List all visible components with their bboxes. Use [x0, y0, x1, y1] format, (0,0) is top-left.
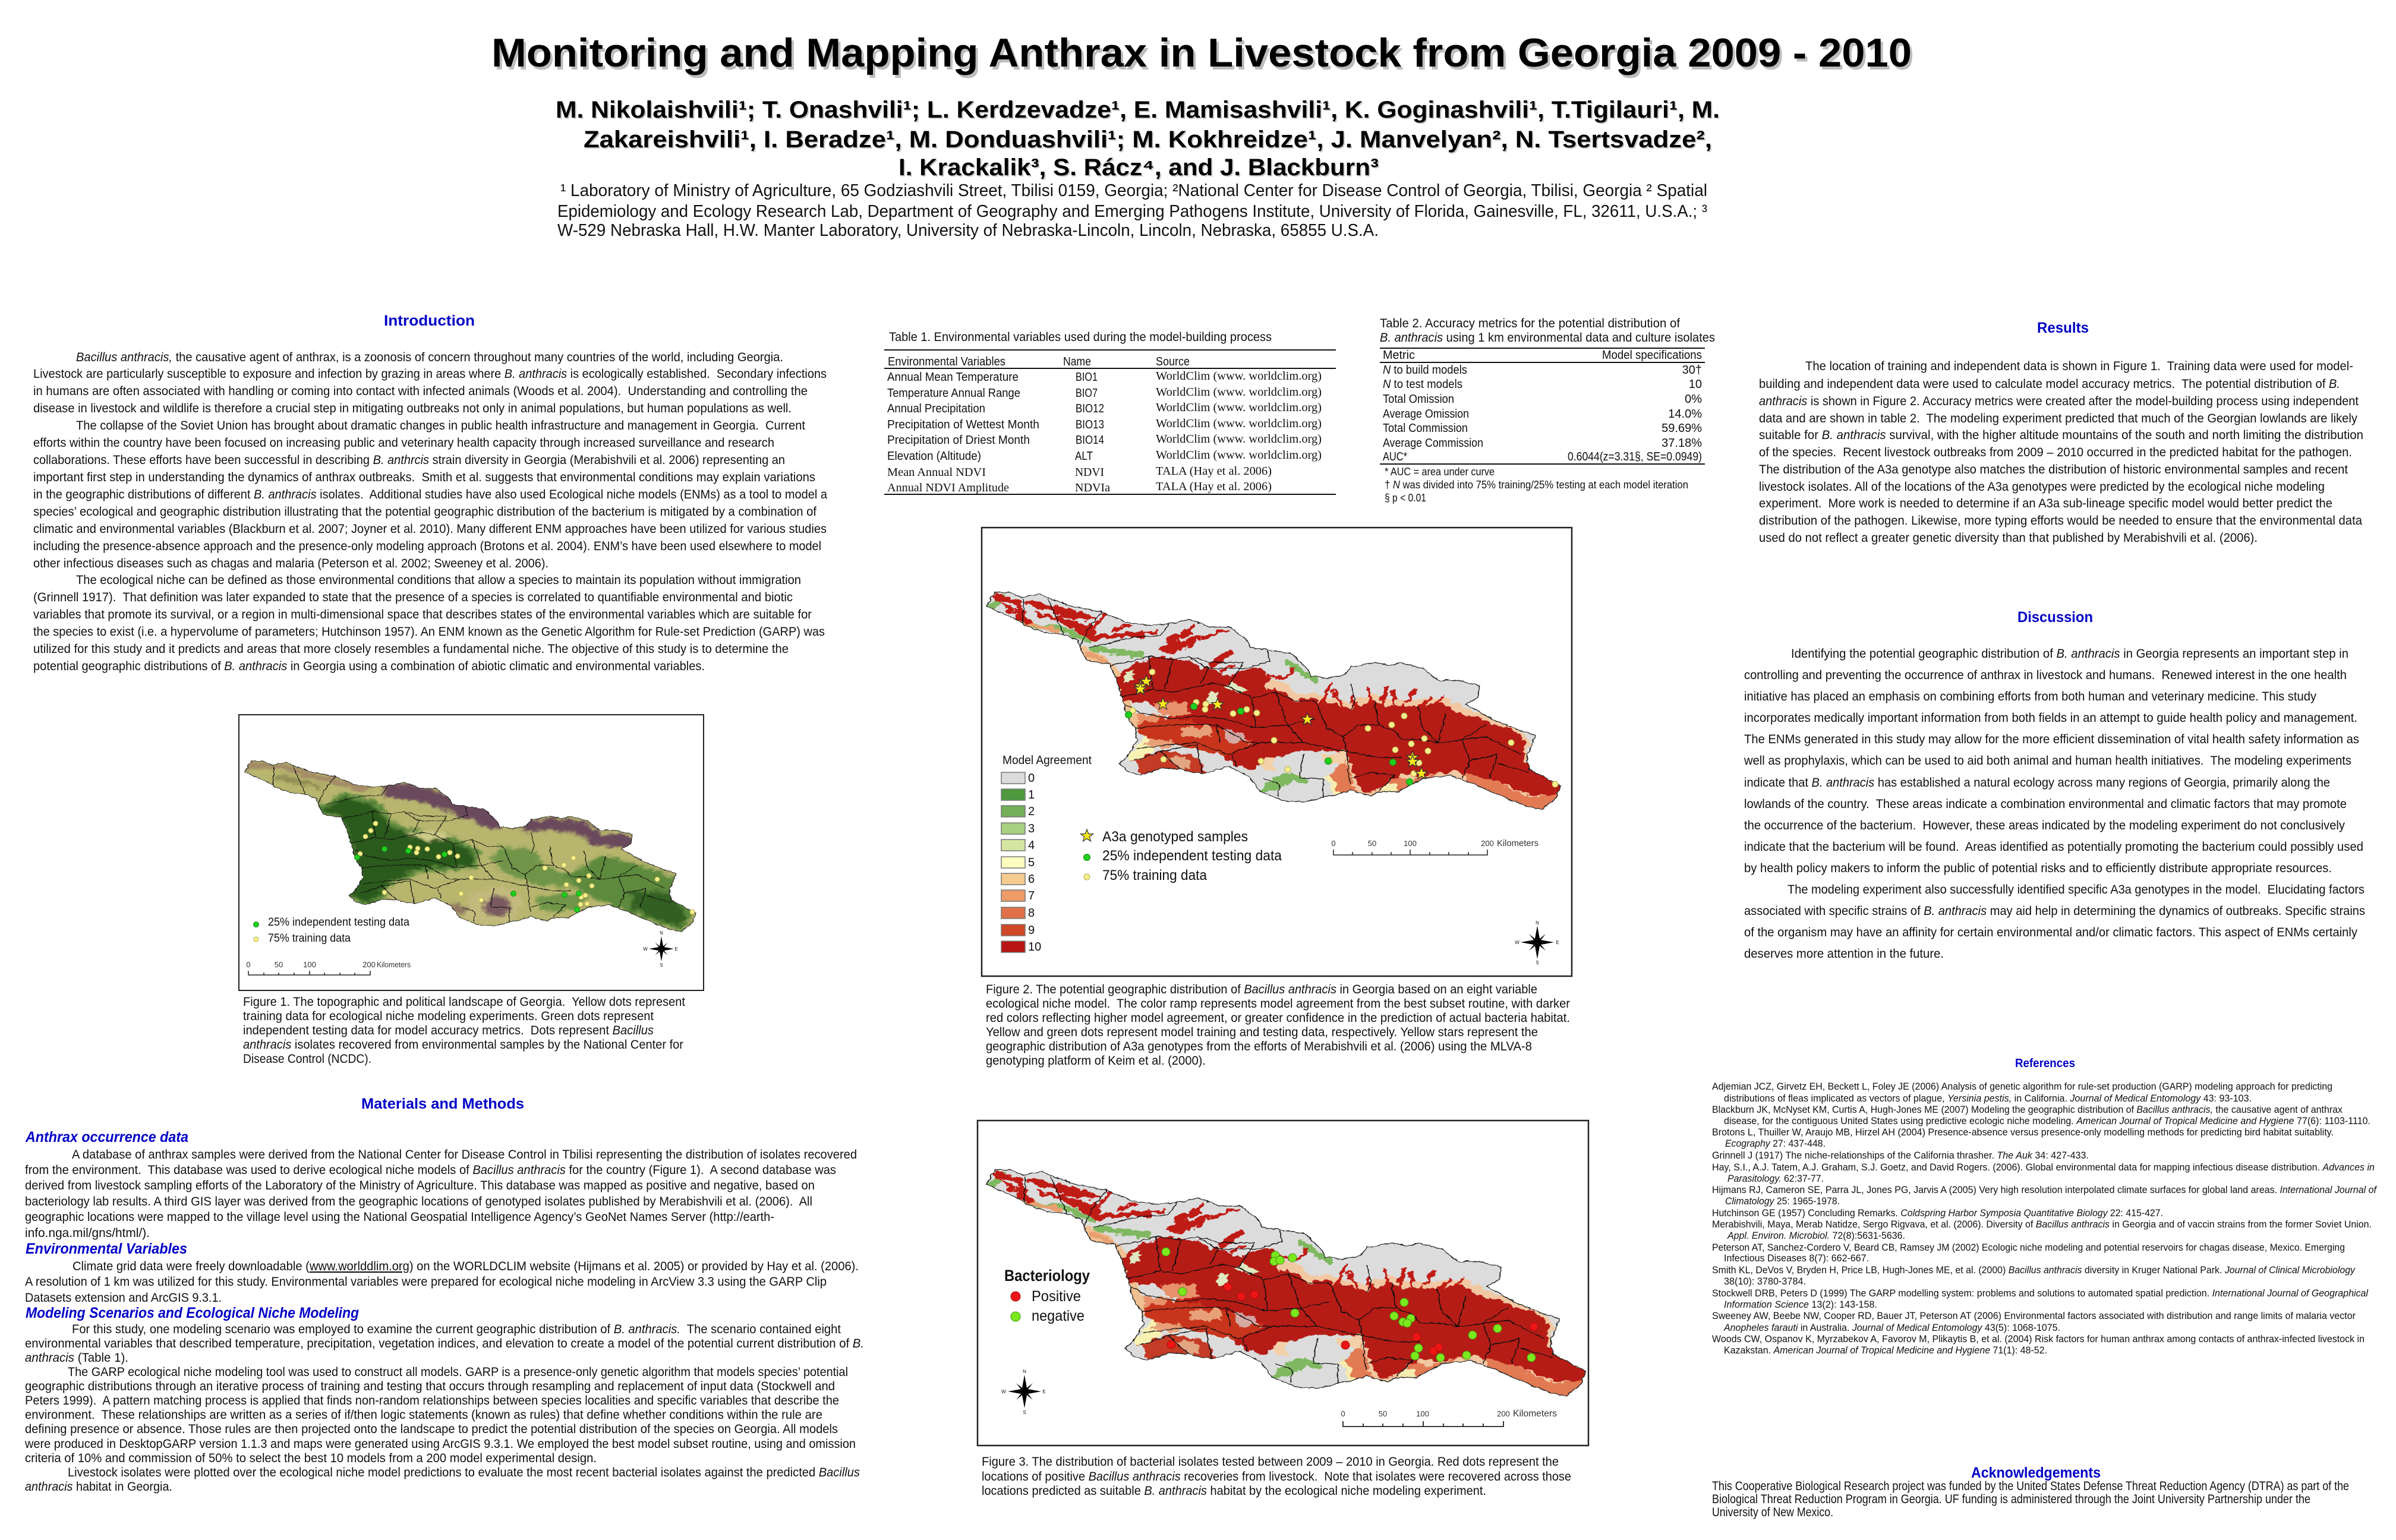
discussion text: [1744, 647, 2365, 961]
references list: Ecography 27: 437-448.: [1725, 1138, 1826, 1149]
figure 3 north arrow: E: [1042, 1389, 1046, 1394]
table 2 rows: 0.6044(z=3.31§, SE=0.0949): [1568, 450, 1702, 463]
figure 2 caption: Yellow and green dots represent model training and testing data, respectively. Yellow stars represent the: [986, 1025, 1538, 1039]
subheading: environmental variables: Environmental Variables: [26, 1241, 187, 1257]
figure 2 model agreement legend: 1: [1028, 788, 1035, 801]
references list: Stockwell DRB, Peters D (1999) The GARP modelling system: problems and solutions to automated spatial prediction. International Journal of Geographical: [1712, 1287, 2369, 1299]
figure 2 caption: [986, 983, 1570, 1068]
modeling scenarios text: criteria of 10% and commission of 50% to select the best 10 models from a 200 model experimental design.: [25, 1451, 597, 1465]
title: Monitoring and Mapping Anthrax in Livestock from Georgia 2009 - 2010: [491, 30, 1912, 75]
introduction text: efforts within the country have been focused on increasing public and veterinary health capacity through increased surveillance and research: [33, 436, 774, 450]
environmental variables text: [25, 1260, 859, 1305]
modeling scenarios text: environmental variables that described temperature, precipitation, vegetation indices, and elevation to create a model of the potential current distribution of B.: [25, 1337, 864, 1350]
heading: materials and methods: Materials and Methods: [361, 1096, 524, 1112]
acknowledgements text: Biological Threat Reduction Program in Georgia. UF funding is administered through the Joint University Partnership under the: [1712, 1492, 2310, 1506]
authors: I. Krackalik³, S. Rácz⁴, and J. Blackburn³: [898, 154, 1379, 181]
modeling scenarios text: anthracis habitat in Georgia.: [25, 1480, 172, 1494]
heading: introduction: Introduction: [384, 313, 475, 329]
references list: distributions of fleas implicated as vectors of plague, Yersinia pestis, in California. Journal of Medical Entomology 43: 93-103.: [1724, 1093, 2252, 1104]
figure 2 model agreement legend: 10: [1028, 941, 1041, 954]
anthrax occurrence text: geographic locations were mapped to the village level using the National Geospatial Intelligence Agency’s GeoNet Names Server (http://earth-: [25, 1210, 774, 1224]
figure 1 caption: [243, 995, 685, 1066]
table 1 rows: BIO12: [1076, 402, 1104, 415]
references list: Woods CW, Ospanov K, Myrzabekov A, Favorov M, Plikaytis B, et al. (2004) Risk factors for human anthrax among contacts of anthrax-infected livestock in: [1712, 1333, 2365, 1345]
discussion text: indicate that B. anthracis has established a natural ecology across many regions of Georgia, primarily along the: [1744, 776, 2330, 790]
table 1 rows: TALA (Hay et al. 2006): [1156, 480, 1272, 493]
table 2 rows: N to test models: [1383, 378, 1462, 391]
figure 2 north arrow: W: [1515, 940, 1519, 945]
figure 1 scale bar: 0: [246, 960, 251, 969]
figure 1 caption: training data for ecological niche modeling experiments. Green dots represent: [243, 1009, 654, 1023]
figure 3 bacteriology legend: negative: [1032, 1308, 1084, 1324]
figure 3 scale bar: 0: [1341, 1409, 1345, 1418]
figure 2 model agreement legend: 5: [1028, 856, 1035, 869]
discussion text: of the organism may have an affinity for certain environmental and/or climatic factors. This aspect of ENMs certainly: [1744, 926, 2357, 939]
figure 1 north arrow: W: [643, 946, 648, 952]
references list: Brotons L, Thuiller W, Araujo MB, Hirzel AH (2004) Presence-absence versus presence-only modelling methods for predicting bird habitat suitablity.: [1712, 1126, 2334, 1138]
results text: used do not reflect a greater genetic diversity than that published by Merabishvili et al. (2006).: [1759, 531, 2258, 545]
figure 2 caption: Figure 2. The potential geographic distribution of Bacillus anthracis in Georgia based on an eight variable: [986, 983, 1537, 996]
introduction text: The ecological niche can be defined as those environmental conditions that allow a species to maintain its population without immigration: [76, 573, 801, 587]
figure 2 north arrow: N: [1536, 920, 1539, 926]
table 2 header: [1383, 349, 1702, 362]
figure 1 caption: anthracis isolates recovered from environmental samples by the National Center for: [243, 1038, 683, 1052]
table 1 rows: ALT: [1075, 450, 1093, 463]
figure 2 caption: genotyping platform of Keim et al. (2000).: [986, 1054, 1206, 1068]
figure 3 north arrow: N: [1023, 1369, 1026, 1374]
table 1 header: Name: [1063, 355, 1091, 368]
discussion text: The ENMs generated in this study may allow for the more efficient dissemination of vital health safety information as: [1744, 733, 2359, 746]
figure 1 caption: independent testing data for model accuracy metrics. Dots represent Bacillus: [243, 1024, 654, 1037]
figure 2 caption: red colors reflecting higher model agreement, or greater confidence in the prediction of actual bacteria habitat.: [986, 1011, 1570, 1025]
table 1 rows: WorldClim (www. worldclim.org): [1156, 401, 1322, 414]
introduction text: utilized for this study and it predicts and areas that more closely resembles a fundamental niche. The objective of this study is to determine the: [33, 642, 789, 656]
table 2 rows: 14.0%: [1668, 408, 1702, 421]
anthrax occurrence text: from the environment. This database was used to derive ecological niche models of Bacillus anthracis for the country (Figure 1). A second database was: [25, 1163, 836, 1177]
figure 2 testing dots: [1126, 703, 1413, 785]
references list: Anopheles farauti in Australia. Journal of Medical Entomology 43(5): 1068-1075.: [1723, 1322, 2060, 1333]
figure 1 scale bar: Kilometers: [377, 960, 411, 969]
introduction text: disease in livestock and wildlife is therefore a crucial step in mitigating outbreaks not only in animal populations, but human populations as well.: [33, 402, 792, 415]
references list: Peterson AT, Sanchez-Cordero V, Beard CB, Ramsey JM (2002) Ecologic niche modeling and potential reservoirs for chagas disease, Mexico. Emerging: [1712, 1242, 2345, 1253]
table 2 header: Metric: [1383, 349, 1415, 362]
table 1 rows: [887, 370, 1322, 494]
figure 2 scale bar: [1331, 838, 1539, 855]
introduction text: important first step in understanding the dynamics of anthrax outbreaks. Smith et al. suggests that environmental conditions may explain variations: [33, 471, 815, 484]
table 2 rows: 30†: [1682, 364, 1702, 377]
references list: disease, for the contiguous United States using predictive ecologic niche modeling. American Journal of Tropical Medicine and Hygiene 77(6): 1103-1110.: [1724, 1115, 2370, 1126]
references list: Hutchinson GE (1957) Concluding Remarks. Coldspring Harbor Symposia Quantitative Biology 22: 415-427.: [1712, 1207, 2163, 1219]
figure 1 north arrow: E: [674, 946, 678, 952]
figure 2 caption: geographic distribution of A3a genotypes from the efforts of Merabishvili et al. (2006) using the MLVA-8: [986, 1040, 1532, 1053]
figure 1 scale bar: 200: [362, 960, 376, 969]
table 2 rows: Total Omission: [1383, 393, 1454, 406]
introduction text: other infectious diseases such as chagas and malaria (Peterson et al. 2002; Sweeney et al. 2006).: [33, 557, 548, 570]
table 2 rows: Average Commission: [1383, 437, 1483, 450]
table 1 header: [888, 355, 1190, 368]
figure 2: model agreement map: [975, 528, 1577, 976]
table 1 rules: [884, 350, 1336, 494]
discussion text: Identifying the potential geographic distribution of B. anthracis in Georgia represents an important step in: [1791, 647, 2348, 661]
figure 3 scale bar: [1341, 1409, 1557, 1427]
figure 2 model agreement legend: 3: [1028, 822, 1035, 835]
figure 3 north arrow: [1001, 1369, 1046, 1415]
results text: The distribution of the A3a genotype also matches the distribution of historic environmental samples and recent: [1759, 463, 2348, 476]
anthrax occurrence text: info.nga.mil/gns/html/).: [25, 1226, 150, 1240]
table 2 footnotes: † N was divided into 75% training/25% testing at each model iteration: [1385, 479, 1688, 491]
table 1 rows: WorldClim (www. worldclim.org): [1156, 433, 1322, 446]
table 2 title: Table 2. Accuracy metrics for the potential distribution of: [1380, 317, 1680, 330]
authors: [556, 97, 1720, 181]
discussion text: The modeling experiment also successfully identified specific A3a genotypes in the model. Elucidating factors: [1787, 883, 2365, 897]
table 1 header: Environmental Variables: [888, 355, 1005, 368]
references list: 38(10): 3780-3784.: [1724, 1276, 1806, 1287]
environmental variables text: Datasets extension and ArcGIS 9.3.1.: [25, 1291, 222, 1305]
introduction text: potential geographic distributions of B. anthracis in Georgia using a combination of abiotic climatic and environmental variables.: [33, 659, 705, 673]
figure 3 caption: [982, 1455, 1571, 1498]
figure 1 topographic landscape map: [244, 760, 696, 933]
table 2 rows: 59.69%: [1662, 422, 1702, 435]
table 2: accuracy metrics: [1380, 317, 1715, 504]
table 2 title: [1380, 317, 1715, 345]
table 1 rows: BIO1: [1076, 371, 1098, 384]
table 1 rows: TALA (Hay et al. 2006): [1156, 465, 1272, 478]
table 2 header: Model specifications: [1602, 349, 1702, 362]
modeling scenarios text: environment. These relationships are written as a series of if/then logic statements (known as rules) that define whether conditions within the rule are: [25, 1408, 822, 1422]
table 2 rows: Total Commission: [1383, 422, 1468, 435]
figure 2 north arrow: E: [1556, 940, 1559, 945]
figure 2 symbol legend: 75% training data: [1102, 867, 1208, 883]
authors: M. Nikolaishvili¹; T. Onashvili¹; L. Kerdzevadze¹, E. Mamisashvili¹, K. Goginashvili¹, T.Tigilauri¹, M.: [556, 97, 1720, 123]
results text: [1759, 359, 2363, 545]
discussion text: controlling and preventing the occurrence of anthrax in livestock and humans. Renewed interest in the one health: [1744, 668, 2347, 682]
figure 1 legend: [253, 916, 409, 945]
subheading: anthrax occurrence data: Anthrax occurrence data: [25, 1129, 188, 1145]
modeling scenarios text: were produced in DesktopGARP version 1.1.3 and maps were generated using ArcGIS 9.3.1. We employed the best model subset routine, using and omission: [24, 1437, 856, 1451]
figure 2 model agreement legend: 9: [1028, 924, 1035, 937]
discussion text: associated with specific strains of B. anthracis may aid help in determining the dynamics of outbreaks. Specific strains: [1744, 904, 2365, 918]
discussion text: indicate that the bacterium will be found. Areas identified as potentially promoting the bacterium could possibly used: [1744, 840, 2363, 854]
results text: livestock isolates. All of the locations of the A3a genotypes were predicted by the ecological niche modeling: [1759, 480, 2325, 494]
figure 2 model agreement legend: 4: [1028, 839, 1035, 852]
figure 2 north arrow: S: [1536, 960, 1539, 965]
results text: The location of training and independent data is shown in Figure 1. Training data were used for model-: [1805, 359, 2353, 373]
table 1 rows: NDVIa: [1075, 481, 1110, 494]
figure 3 scale bar: 200: [1497, 1409, 1510, 1418]
figure 1 caption: Figure 1. The topographic and political landscape of Georgia. Yellow dots represent: [243, 995, 685, 1009]
environmental variables text: Climate grid data were freely downloadable (www.worlddlim.org) on the WORLDCLIM website (Hijmans et al. 2005) or provided by Hay et al. (2006).: [72, 1260, 859, 1273]
acknowledgements text: [1712, 1479, 2349, 1519]
modeling scenarios text: [24, 1323, 864, 1494]
references list: Hay, S.I., A.J. Tatem, A.J. Graham, S.J. Goetz, and David Rogers. (2006). Global environmental data for mapping infectious disease distribution. Advances in: [1712, 1162, 2375, 1173]
references list: Kazakstan. American Journal of Tropical Medicine and Hygiene 71(1): 48-52.: [1724, 1345, 2047, 1356]
table 1 rows: Annual Precipitation: [887, 402, 985, 415]
table 1 rows: Temperature Annual Range: [887, 387, 1020, 400]
results text: data and are shown in table 2. The modeling experiment predicted that much of the Georgian lowlands are likely: [1759, 412, 2357, 425]
affiliations: [557, 181, 1707, 240]
introduction text: The collapse of the Soviet Union has brought about dramatic changes in public health infrastructure and management in Georgia. Current: [76, 419, 805, 433]
modeling scenarios text: Peters 1999). A pattern matching process is applied that finds non-random relationships between species localities and specific variables that describe the: [25, 1394, 839, 1408]
table 2 footnotes: * AUC = area under curve: [1385, 466, 1495, 478]
references list: Smith KL, DeVos V, Bryden H, Price LB, Hugh-Jones ME, et al. (2000) Bacillus anthracis diversity in Kruger National Park. Journal of Clinical Microbiology: [1712, 1264, 2356, 1276]
figure 2 A3a genotype stars: [1134, 675, 1427, 779]
figure 3 caption: Figure 3. The distribution of bacterial isolates tested between 2009 – 2010 in Georgia. Red dots represent the: [982, 1455, 1559, 1469]
modeling scenarios text: The GARP ecological niche modeling tool was used to construct all models. GARP is a presence-only genetic algorithm that models species’ potential: [68, 1365, 848, 1379]
figure 3 scale bar: 100: [1416, 1409, 1429, 1418]
heading: references: References: [2015, 1057, 2075, 1070]
references list: Sweeney AW, Beebe NW, Cooper RD, Bauer JT, Peterson AT (2006) Environmental factors associated with distribution and range limits of malaria vector: [1712, 1310, 2356, 1321]
figure 2 north arrow: [1515, 920, 1559, 965]
table 1 rows: Precipitation of Wettest Month: [887, 418, 1039, 431]
figure 1 legend: 25% independent testing data: [268, 916, 409, 929]
table 2 rows: 0%: [1685, 393, 1702, 406]
references list: Appl. Environ. Microbiol. 72(8):5631-5636.: [1727, 1230, 1905, 1241]
figure 3 bacteriology legend: Bacteriology: [1004, 1267, 1090, 1285]
figure 3 north arrow: S: [1023, 1410, 1026, 1415]
results text: experiment. More work is needed to determine if an A3a sub-lineage specific model would better predict the: [1759, 497, 2332, 510]
table 1 rows: BIO14: [1076, 434, 1104, 447]
figure 2 scale bar: 200: [1481, 839, 1494, 848]
table 1 rows: Mean Annual NDVI: [887, 466, 986, 479]
subheading: modeling scenarios: Modeling Scenarios and Ecological Niche Modeling: [26, 1305, 359, 1321]
table 2 rules: [1380, 348, 1705, 464]
introduction text: species’ ecological and geographic distribution illustrating that the potential geographic distribution of the bacterium is mitigated by a combination of: [33, 505, 816, 519]
table 2 rows: [1383, 364, 1702, 463]
figure 2 scale bar: Kilometers: [1497, 838, 1539, 848]
discussion text: initiative has placed an emphasis on combining efforts from both human and veterinary medicine. This study: [1744, 690, 2316, 703]
figure 2 training dots: [1130, 669, 1558, 787]
discussion text: well as prophylaxis, which can be used to aid both animal and human health initiatives. The modeling experiments: [1744, 754, 2351, 768]
figure 1 scale bar: 50: [275, 960, 283, 969]
discussion text: lowlands of the country. These areas indicate a combination environmental and climatic factors that may promote: [1744, 797, 2347, 811]
table 1: environmental variables: [884, 330, 1336, 494]
anthrax occurrence text: bacteriology lab results. A third GIS layer was derived from the geographic locations of genotyped isolates published by Merabishvili et al. (2006). All: [25, 1195, 812, 1208]
figure 1 north arrow: [643, 930, 678, 968]
table 1 rows: Annual Mean Temperature: [887, 371, 1019, 384]
figure 2 symbol legend: 25% independent testing data: [1102, 848, 1282, 864]
introduction text: variables that promote its survival, or a region in multi-dimensional space that describes states of the environmental variables which are suitable for: [33, 608, 812, 621]
figure 1: topographic map: [235, 715, 708, 990]
figure 2 symbol legend: [1080, 829, 1282, 883]
modeling scenarios text: defining presence or absence. Those rules are then projected onto the landscape to predict the potential distribution of the species on Georgia. All models: [25, 1422, 838, 1436]
introduction text: (Grinnell 1917). That definition was later expanded to state that the presence of a species is correlated to quantifiable environmental and biotic: [33, 591, 793, 604]
figure 1 scale bar: [246, 960, 411, 975]
figure 2 model agreement legend: 2: [1028, 805, 1035, 818]
figure 1 scale bar: 100: [303, 960, 316, 969]
results text: distribution of the pathogen. Likewise, more typing efforts would be needed to ensure that the environmental data: [1759, 514, 2362, 528]
table 1 rows: Precipitation of Driest Month: [887, 434, 1030, 447]
discussion text: deserves more attention in the future.: [1744, 947, 1944, 961]
results text: suitable for B. anthracis survival, with the higher altitude mountains of the south and north limiting the distribution: [1759, 428, 2363, 442]
figure 1 north arrow: N: [660, 930, 663, 936]
table 2 footnotes: [1385, 466, 1688, 504]
modeling scenarios text: For this study, one modeling scenario was employed to examine the current geographic distribution of B. anthracis. The scenario contained eight: [72, 1323, 841, 1336]
modeling scenarios text: geographic distributions through an iterative process of training and testing that occurs through resampling and replacement of input data (Stockwell and: [25, 1380, 835, 1393]
figure 3 frame: [978, 1121, 1588, 1446]
table 1 rows: BIO13: [1076, 418, 1104, 431]
anthrax occurrence text: [25, 1148, 857, 1240]
figure 2 frame: [982, 528, 1572, 976]
acknowledgements text: University of New Mexico.: [1712, 1506, 1833, 1519]
anthrax occurrence text: derived from livestock sampling efforts of the Laboratory of the Ministry of Agriculture. This database was mapped as positive and negative, based on: [25, 1179, 815, 1192]
figure 2 model agreement legend: 0: [1028, 772, 1035, 785]
figure 3 positive sample dots: [1167, 1283, 1538, 1355]
figure 1 frame: [239, 715, 704, 990]
table 2 rows: 10: [1689, 378, 1702, 391]
table 1 rows: Elevation (Altitude): [887, 450, 981, 463]
introduction text: in the geographic distributions of different B. anthracis isolates. Additional studies have also used Ecological niche models (ENMs) as a tool to model a: [33, 488, 827, 501]
table 1 header: Source: [1156, 355, 1190, 368]
figure 3 caption: locations predicted as suitable B. anthracis habitat by the ecological niche modeling experiment.: [982, 1484, 1486, 1498]
table 1 rows: WorldClim (www. worldclim.org): [1156, 449, 1322, 462]
figure 3 niche model map: [985, 1169, 1587, 1397]
references list: Information Science 13(2): 143-158.: [1724, 1299, 1877, 1310]
table 2 rows: Average Omission: [1383, 408, 1469, 421]
references list: Blackburn JK, McNyset KM, Curtis A, Hugh-Jones ME (2007) Modeling the geographic distribution of Bacillus anthracis, the causative agent of anthrax: [1712, 1104, 2343, 1115]
table 1 rows: WorldClim (www. worldclim.org): [1156, 386, 1322, 399]
modeling scenarios text: Livestock isolates were plotted over the ecological niche model predictions to evaluate the most recent bacterial isolates against the predicted Bacillus: [68, 1466, 860, 1479]
references list: Parasitology. 62:37-77.: [1727, 1173, 1824, 1184]
references list: Grinnell J (1917) The niche-relationships of the California thrasher. The Auk 34: 427-433.: [1712, 1150, 2089, 1161]
figure 3 bacteriology legend: [1004, 1267, 1090, 1324]
results text: anthracis is shown in Figure 2. Accuracy metrics were created after the model-building process using independent: [1759, 395, 2359, 408]
table 2 title: B. anthracis using 1 km environmental data and culture isolates: [1380, 331, 1715, 345]
discussion text: the occurrence of the bacterium. However, these areas indicated by the modeling experiment do not conclusively: [1744, 819, 2345, 832]
figure 3 scale bar: Kilometers: [1513, 1409, 1557, 1419]
table 1 rows: WorldClim (www. worldclim.org): [1156, 370, 1322, 383]
references list: [1712, 1081, 2378, 1356]
authors: Zakareishvili¹, I. Beradze¹, M. Donduashvili¹; M. Kokhreidze¹, J. Manvelyan², N. Tsertsvadze²,: [584, 127, 1712, 153]
figure 2 niche model map: [986, 591, 1562, 810]
table 2 footnotes: § p < 0.01: [1385, 492, 1426, 504]
introduction text: Livestock are particularly susceptible to exposure and infection by grazing in areas where B. anthracis is ecologically established. Secondary infections: [33, 367, 827, 381]
figure 2 model agreement legend: 7: [1028, 889, 1035, 902]
heading: results: Results: [2037, 320, 2089, 336]
figure 2 scale bar: 100: [1404, 839, 1417, 848]
references list: Infectious Diseases 8(7): 662-667.: [1724, 1252, 1869, 1264]
figure 1 testing data dots: [354, 846, 581, 913]
introduction text: in humans are often associated with handling or coming into contact with infected animals (Woods et al. 2004). Understanding and controlling the: [33, 384, 808, 398]
affiliations: ¹ Laboratory of Ministry of Agriculture, 65 Godziashvili Street, Tbilisi 0159, Georgia; ²National Center for Disease Control of Georgia, Tbilisi, Georgia ² Spatial: [560, 181, 1707, 200]
figure 2 scale bar: 50: [1368, 839, 1376, 848]
discussion text: incorporates medically important information from both fields in an attempt to guide health policy and management.: [1744, 711, 2357, 725]
anthrax occurrence text: A database of anthrax samples were derived from the National Center for Disease Control in Tbilisi representing the distribution of isolates recovered: [72, 1148, 857, 1162]
figure 1 training data dots: [358, 821, 695, 914]
figure 1 legend: 75% training data: [268, 932, 351, 945]
table 1 title: Table 1. Environmental variables used during the model-building process: [889, 330, 1272, 344]
affiliations: Epidemiology and Ecology Research Lab, Department of Geography and Emerging Pathogens Institute, University of Florida, Gainesville, FL, 32611, U.S.A.; ³: [557, 202, 1707, 221]
figure 1 caption: Disease Control (NCDC).: [243, 1052, 371, 1066]
introduction text: climatic and environmental variables (Blackburn et al. 2007; Joyner et al. 2010). Many different ENM approaches have been utilized for various studies: [33, 522, 827, 536]
modeling scenarios text: anthracis (Table 1).: [25, 1351, 128, 1365]
heading: discussion: Discussion: [2017, 609, 2093, 626]
table 1 rows: Annual NDVI Amplitude: [887, 481, 1009, 494]
figure 2 caption: ecological niche model. The color ramp represents model agreement from the best subset routine, with darker: [986, 997, 1570, 1011]
figure 2 model agreement legend: Model Agreement: [1002, 754, 1092, 767]
introduction text: including the presence-absence approach and the presence-only modeling approach (Brotons et al. 2004). ENM’s have been used elsewhere to model: [33, 539, 821, 553]
figure 3 scale bar: 50: [1379, 1409, 1387, 1418]
table 2 rows: 37.18%: [1662, 437, 1702, 450]
results text: building and independent data were used to calculate model accuracy metrics. The potential distribution of B.: [1759, 377, 2340, 391]
heading: acknowledgements: Acknowledgements: [1971, 1465, 2101, 1481]
introduction text: collaborations. These efforts have been successful in describing B. anthrcis strain diversity in Georgia (Merabishvili et al. 2006) representing an: [33, 453, 785, 467]
table 2 rows: N to build models: [1383, 364, 1467, 377]
figure 2 model agreement legend: 6: [1028, 873, 1035, 886]
environmental variables text: A resolution of 1 km was utilized for this study. Environmental variables were prepared for ecological niche modeling in ArcView 3.3 using the GARP Clip: [25, 1275, 827, 1289]
figure 3 north arrow: W: [1001, 1389, 1006, 1394]
figure 1 north arrow: S: [660, 962, 663, 968]
introduction text: Bacillus anthracis, the causative agent of anthrax, is a zoonosis of concern throughout many countries of the world, including Georgia.: [76, 351, 783, 364]
figure 3 caption: locations of positive Bacillus anthracis recoveries from livestock. Note that isolates were recovered across those: [982, 1470, 1571, 1484]
figure 2 model agreement legend: [1001, 754, 1092, 954]
affiliations: W-529 Nebraska Hall, H.W. Manter Laboratory, University of Nebraska-Lincoln, Lincoln, Nebraska, 65855 U.S.A.: [557, 221, 1379, 240]
references list: Hijmans RJ, Cameron SE, Parra JL, Jones PG, Jarvis A (2005) Very high resolution interpolated climate surfaces for global land areas. International Journal of: [1712, 1184, 2378, 1195]
figure 3: bacteriology map: [974, 1121, 1603, 1446]
figure 3 negative sample dots: [1162, 1248, 1536, 1362]
table 1 rows: BIO7: [1076, 387, 1098, 400]
figure 2 symbol legend: A3a genotyped samples: [1102, 829, 1248, 845]
table 1 rows: NDVI: [1075, 466, 1104, 479]
figure 2 model agreement legend: 8: [1028, 907, 1035, 920]
table 2 rows: AUC*: [1383, 450, 1407, 463]
discussion text: by health policy makers to inform the public of potential risks and to efficiently distribute appropriate resources.: [1744, 861, 2332, 875]
references list: Adjemian JCZ, Girvetz EH, Beckett L, Foley JE (2006) Analysis of genetic algorithm for rule-set production (GARP) modeling approach for predicting: [1712, 1081, 2332, 1092]
introduction text: [33, 351, 827, 673]
results text: of the species. Recent livestock outbreaks from 2009 – 2010 occurred in the predicted habitat for the pathogen.: [1759, 446, 2352, 459]
references list: Climatology 25: 1965-1978.: [1725, 1195, 1840, 1207]
references list: Merabishvili, Maya, Merab Natidze, Sergo Rigvava, et al. (2006). Diversity of Bacillus anthracis in Georgia and of vaccin strains from the former Soviet Union.: [1712, 1219, 2372, 1230]
table 1 rows: WorldClim (www. worldclim.org): [1156, 417, 1322, 430]
figure 3 bacteriology legend: Positive: [1032, 1288, 1081, 1305]
figure 2 scale bar: 0: [1331, 839, 1336, 848]
introduction text: the species to exist (i.e. a hypervolume of parameters; Hutchinson 1957). An ENM known as the Genetic Algorithm for Rule-set Prediction (GARP) was: [33, 625, 825, 639]
